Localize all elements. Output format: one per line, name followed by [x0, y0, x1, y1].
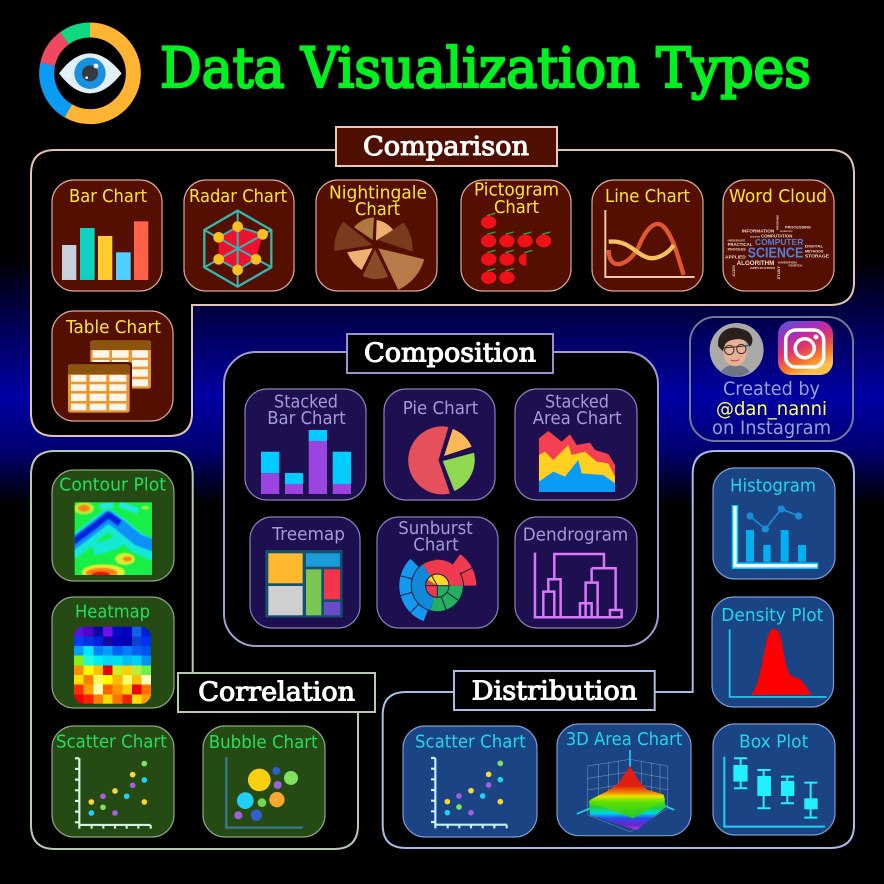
- panel: composition: [224, 334, 658, 646]
- icon: instagram: [778, 321, 833, 375]
- icon: 3D surface: [577, 750, 674, 832]
- card: bubble chart: Bubble Chart: [209, 733, 318, 753]
- icon: pie: [408, 426, 475, 494]
- icon: contour map: [74, 502, 152, 575]
- title: Data Visualization Types: [160, 36, 811, 100]
- card: stacked area chart: Stacked: [545, 392, 609, 412]
- heading: Distribution: [454, 671, 655, 710]
- card: scatter chart (distribution): [403, 726, 537, 837]
- icon: word cloud text: ACCESS: [732, 265, 736, 277]
- card: pictogram chart: Pictogram: [474, 181, 559, 201]
- icon: scatter plot: [75, 758, 151, 829]
- icon: word cloud text: THEORETICAL: [788, 265, 803, 268]
- card: dendrogram: Dendrogram: [523, 526, 628, 546]
- icon: word cloud text: INFORMATION: [742, 229, 774, 234]
- card: word cloud: Word Cloud: [729, 187, 827, 207]
- card: sunburst chart: [377, 517, 498, 631]
- card: scatter chart (distribution): Scatter Chart: [415, 733, 526, 753]
- card: stacked bar chart: Stacked: [274, 392, 338, 412]
- icon: word cloud text: APPLICATION: [750, 266, 775, 270]
- icon: word cloud text: PROCESSING: [785, 225, 811, 229]
- card: density plot: [712, 597, 834, 707]
- icon: word cloud text: STORAGE: [805, 254, 830, 260]
- card: scatter chart (correlation): [52, 726, 174, 837]
- text: credit: @dan_nanni: [716, 398, 827, 420]
- card: heatmap: [52, 597, 174, 708]
- heading: Correlation: [178, 673, 375, 712]
- card: stacked area chart: Area Chart: [533, 409, 622, 429]
- card: pictogram chart: Chart: [494, 198, 539, 218]
- card: contour plot: [52, 470, 174, 581]
- icon: rose wedges: [334, 217, 424, 290]
- icon: word cloud text: COMPUTER: [755, 237, 803, 247]
- card: stacked bar chart: [245, 389, 366, 500]
- card: sunburst chart: Chart: [413, 536, 459, 556]
- text: credit: [712, 378, 831, 439]
- icon: scatter plot: [431, 758, 507, 828]
- card: heatmap: Heatmap: [75, 603, 150, 623]
- card: line chart: [592, 180, 703, 291]
- icon: word cloud text: PROCESS: [728, 247, 746, 252]
- card: pie chart: Pie Chart: [403, 399, 478, 419]
- icon: word cloud text: DIGITAL: [805, 245, 824, 249]
- icon: word cloud text: PRACTICAL: [728, 242, 753, 247]
- heading: Composition: Composition: [364, 338, 536, 369]
- panel: correlation: [31, 451, 375, 849]
- heading: Distribution: Distribution: [472, 675, 637, 706]
- card: density plot: Density Plot: [721, 606, 823, 626]
- card: dendrogram: [515, 517, 637, 628]
- card: bar chart: Bar Chart: [69, 187, 147, 207]
- panel: distribution: [383, 451, 854, 848]
- icon: two tables: [65, 340, 151, 415]
- icon: bars: [62, 221, 148, 280]
- heading: Comparison: [336, 127, 557, 166]
- icon: bubbles: [226, 757, 303, 828]
- card: pictogram chart: [461, 180, 571, 291]
- text: credit: on Instagram: [712, 417, 831, 439]
- icon: apples: [481, 213, 551, 284]
- card: bubble chart: [203, 726, 325, 837]
- icon: word cloud text: SCIENTIFIC: [780, 231, 793, 233]
- text: credit: Created by: [723, 378, 820, 400]
- card: histogram: [713, 468, 835, 579]
- card: 3D area chart: [557, 724, 691, 836]
- icon: word cloud text: SCIENCE: [748, 246, 804, 262]
- card: treemap: Treemap: [271, 525, 345, 545]
- icon: word cloud text: UNDERGRADUATE: [728, 240, 745, 243]
- icon: word cloud text: [725, 215, 830, 279]
- icon: heatmap grid: [74, 627, 151, 704]
- card: table chart: [52, 311, 173, 421]
- icon: word cloud text: INVENTION: [778, 260, 797, 264]
- icon: word cloud text: ALGORITHM: [737, 260, 774, 267]
- icon: radar: [204, 211, 271, 287]
- card: treemap: [250, 517, 360, 628]
- icon: dendrogram: [535, 553, 622, 617]
- icon: word cloud text: PROGRAMS: [775, 215, 779, 230]
- icon: word cloud text: EDUCATION: [750, 235, 760, 238]
- heading: Correlation: Correlation: [198, 677, 355, 708]
- card: scatter chart (correlation): Scatter Chart: [56, 733, 167, 753]
- card: box plot: Box Plot: [739, 732, 808, 752]
- card: nightingale chart: Chart: [355, 200, 400, 220]
- icon: word cloud text: APPLIED: [725, 254, 746, 260]
- card: radar chart: Radar Chart: [189, 187, 287, 207]
- card: line chart: Line Chart: [605, 187, 690, 207]
- heading: Comparison: Comparison: [363, 131, 529, 162]
- card: nightingale chart: [316, 180, 437, 291]
- card: bar chart: [52, 180, 162, 291]
- panel: comparison: [31, 127, 854, 436]
- card: stacked area chart: [515, 389, 637, 500]
- icon: word cloud text: STUDY: [776, 266, 781, 279]
- card: radar chart: [184, 180, 294, 291]
- logo: eye in donut ring: [29, 13, 151, 134]
- heading: Composition: [347, 334, 553, 373]
- card: table chart: Table Chart: [65, 318, 161, 338]
- icon: density curve: [730, 629, 827, 697]
- icon: box plots: [724, 757, 825, 827]
- card: histogram: Histogram: [730, 477, 816, 497]
- card: contour plot: Contour Plot: [59, 476, 166, 496]
- icon: histogram: [735, 505, 818, 566]
- icon: word cloud text: COMPUTATION: [761, 233, 792, 238]
- icon: treemap: [265, 550, 343, 617]
- icon: word cloud text: METHODS: [805, 249, 824, 253]
- icon: sunburst: [392, 540, 483, 631]
- card: sunburst chart: Sunburst: [398, 519, 473, 539]
- icon: stacked bars: [261, 430, 351, 494]
- panel: credit: [690, 317, 853, 441]
- icon: stacked area: [539, 431, 615, 492]
- card: box plot: [713, 724, 835, 835]
- card: word cloud: [723, 180, 834, 291]
- card: stacked bar chart: Bar Chart: [267, 409, 346, 429]
- card: nightingale chart: Nightingale: [329, 184, 427, 204]
- card: 3D area chart: 3D Area Chart: [566, 730, 682, 750]
- icon: line curves: [605, 210, 695, 277]
- card: pie chart: [384, 389, 495, 500]
- icon: avatar: [710, 323, 764, 377]
